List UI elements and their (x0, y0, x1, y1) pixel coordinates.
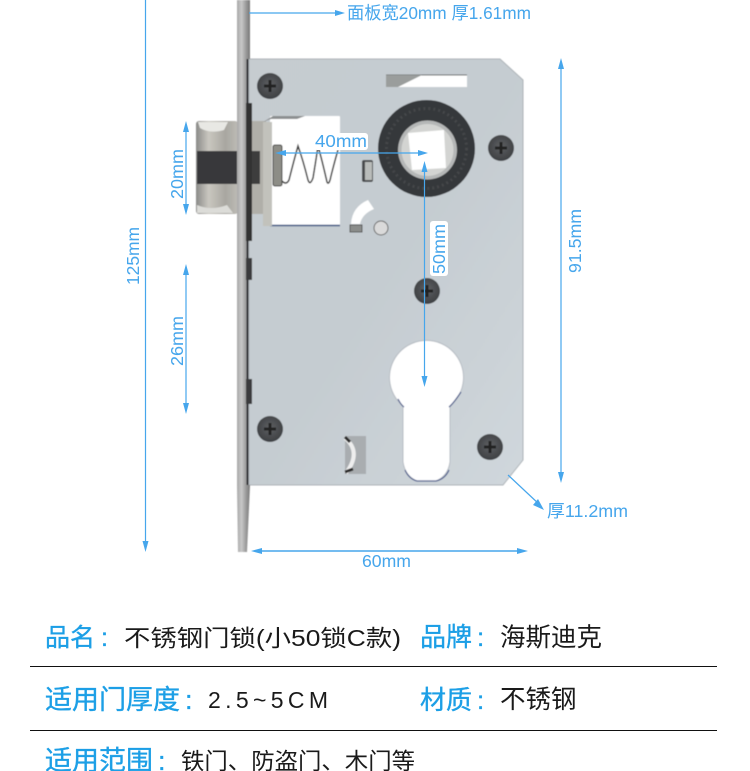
dimension: 40mm (275, 131, 428, 156)
dimension annotations (123, 0, 628, 571)
row 1: name and brand: 品牌 (420, 622, 472, 652)
dimension: 40mm: 40mm (315, 131, 367, 151)
top slot (386, 75, 467, 87)
latch bolt (196, 121, 238, 214)
screw: top left (257, 73, 283, 99)
spring window (250, 116, 340, 226)
dimension: 20mm: 20mm (167, 149, 187, 199)
face plate (237, 0, 252, 552)
spring (281, 146, 338, 183)
dimension: panel width and thickness (249, 3, 531, 23)
dimension: 50mm: 50mm (429, 224, 449, 274)
row 2: door thickness and material (45, 685, 577, 715)
lock case plate (249, 59, 523, 485)
lock body illustration (196, 0, 523, 552)
row 2: door thickness and material: 2.5~5CM (208, 687, 328, 713)
dimension: 91.5mm (558, 58, 585, 483)
row 2: door thickness and material: 材质 (420, 685, 472, 715)
lower latch slot (345, 436, 366, 474)
dimension: 125mm (123, 0, 148, 552)
row 1: name and brand: 不锈钢门锁(小50锁C款) (124, 625, 401, 651)
screw: bottom left (257, 416, 283, 442)
row 1: name and brand: : (477, 622, 484, 652)
latch bolt tail (250, 116, 305, 226)
screw: bottom right (477, 434, 503, 460)
dimension: 60mm (251, 548, 528, 571)
dimension: 125mm: 125mm (123, 227, 143, 285)
cylinder keyhole (390, 340, 463, 481)
row 1: name and brand (45, 622, 602, 652)
dimension: 60mm: 60mm (362, 551, 411, 571)
row 3: applicable range (45, 746, 415, 771)
row 1: name and brand: 海斯迪克 (500, 624, 602, 652)
spindle hub (378, 100, 475, 197)
dimension: panel width and thickness: 面板宽20mm 厚1.61mm (347, 3, 531, 23)
row 2: door thickness and material: : (477, 685, 484, 715)
small slot (362, 160, 373, 182)
dimension: 20mm (167, 121, 189, 215)
specification table (30, 622, 717, 771)
dimension: 26mm: 26mm (167, 316, 187, 366)
row 2: door thickness and material: 适用门厚度 (45, 685, 180, 715)
dimension: thickness 11.2mm: 厚11.2mm (547, 501, 628, 521)
screw: right (488, 135, 514, 161)
curved slot (351, 200, 374, 224)
dimension: 50mm (422, 161, 449, 387)
dimension: thickness 11.2mm (508, 475, 628, 521)
row 1: name and brand: : (101, 624, 108, 652)
row 2: door thickness and material: : (185, 685, 193, 715)
dimension: 91.5mm: 91.5mm (565, 209, 585, 273)
row 1: name and brand: 品名 (45, 624, 95, 652)
dimension: 26mm (167, 264, 189, 414)
screw: centre (414, 278, 440, 304)
small fittings (350, 221, 388, 235)
row 2: door thickness and material: 不锈钢 (500, 686, 577, 714)
